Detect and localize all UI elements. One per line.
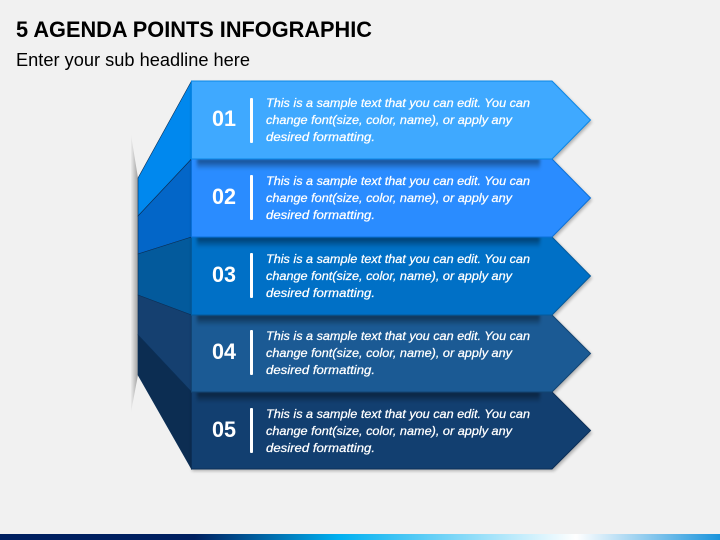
- footer gradient bar: [0, 534, 720, 540]
- band 5 text: [266, 407, 530, 455]
- band 5 text: desired formatting.: [266, 441, 375, 455]
- band 3 text: [266, 252, 530, 300]
- band 4 divider: [250, 330, 253, 375]
- facet 2: [138, 159, 192, 254]
- band 2 text: desired formatting.: [266, 208, 375, 222]
- band 4: [192, 315, 590, 392]
- band 5: [192, 392, 590, 469]
- band 4 text: [266, 329, 530, 377]
- band 5 text: change font(size, color, name), or apply any: [266, 424, 513, 438]
- band 2 top shadow: [197, 159, 540, 170]
- band 3 text: This is a sample text that you can edit. You can: [266, 252, 530, 266]
- arrow drop shadows: [192, 83, 592, 471]
- facet 1: [138, 81, 192, 216]
- band 1 text: desired formatting.: [266, 130, 375, 144]
- band 1 text: This is a sample text that you can edit. You can: [266, 96, 530, 110]
- band 3: [192, 237, 590, 315]
- band 3 text: desired formatting.: [266, 286, 375, 300]
- band 3 divider: [250, 253, 253, 298]
- band 5 text: This is a sample text that you can edit. You can: [266, 407, 530, 421]
- band 4 top shadow: [197, 315, 540, 326]
- band 3 number: 03: [212, 262, 236, 287]
- band 1 text: [266, 96, 530, 144]
- band 1 number: 01: [212, 106, 236, 131]
- band 2: [192, 159, 590, 237]
- facet 4: [138, 295, 192, 392]
- band 1 divider: [250, 98, 253, 143]
- band 1: [192, 81, 590, 159]
- band 3 top shadow: [197, 237, 540, 248]
- facet 3: [138, 237, 192, 315]
- facet 5: [138, 335, 192, 469]
- band 2 number: 02: [212, 184, 236, 209]
- band 4 text: desired formatting.: [266, 363, 375, 377]
- band 4 text: This is a sample text that you can edit. You can: [266, 329, 530, 343]
- subtitle: Enter your sub headline here: [16, 50, 250, 70]
- band 2 divider: [250, 175, 253, 220]
- band 5 number: 05: [212, 417, 236, 442]
- left edge shadow: [131, 135, 138, 412]
- band 5 top shadow: [197, 392, 540, 403]
- band 1 text: change font(size, color, name), or apply any: [266, 113, 513, 127]
- band 2 text: change font(size, color, name), or apply any: [266, 191, 513, 205]
- band 2 text: This is a sample text that you can edit. You can: [266, 174, 530, 188]
- title: 5 AGENDA POINTS INFOGRAPHIC: [16, 17, 372, 42]
- band 3 text: change font(size, color, name), or apply any: [266, 269, 513, 283]
- band 2 text: [266, 174, 530, 222]
- band 4 text: change font(size, color, name), or apply any: [266, 346, 513, 360]
- band 4 number: 04: [212, 339, 237, 364]
- band 5 divider: [250, 408, 253, 453]
- left side facets: [138, 81, 192, 469]
